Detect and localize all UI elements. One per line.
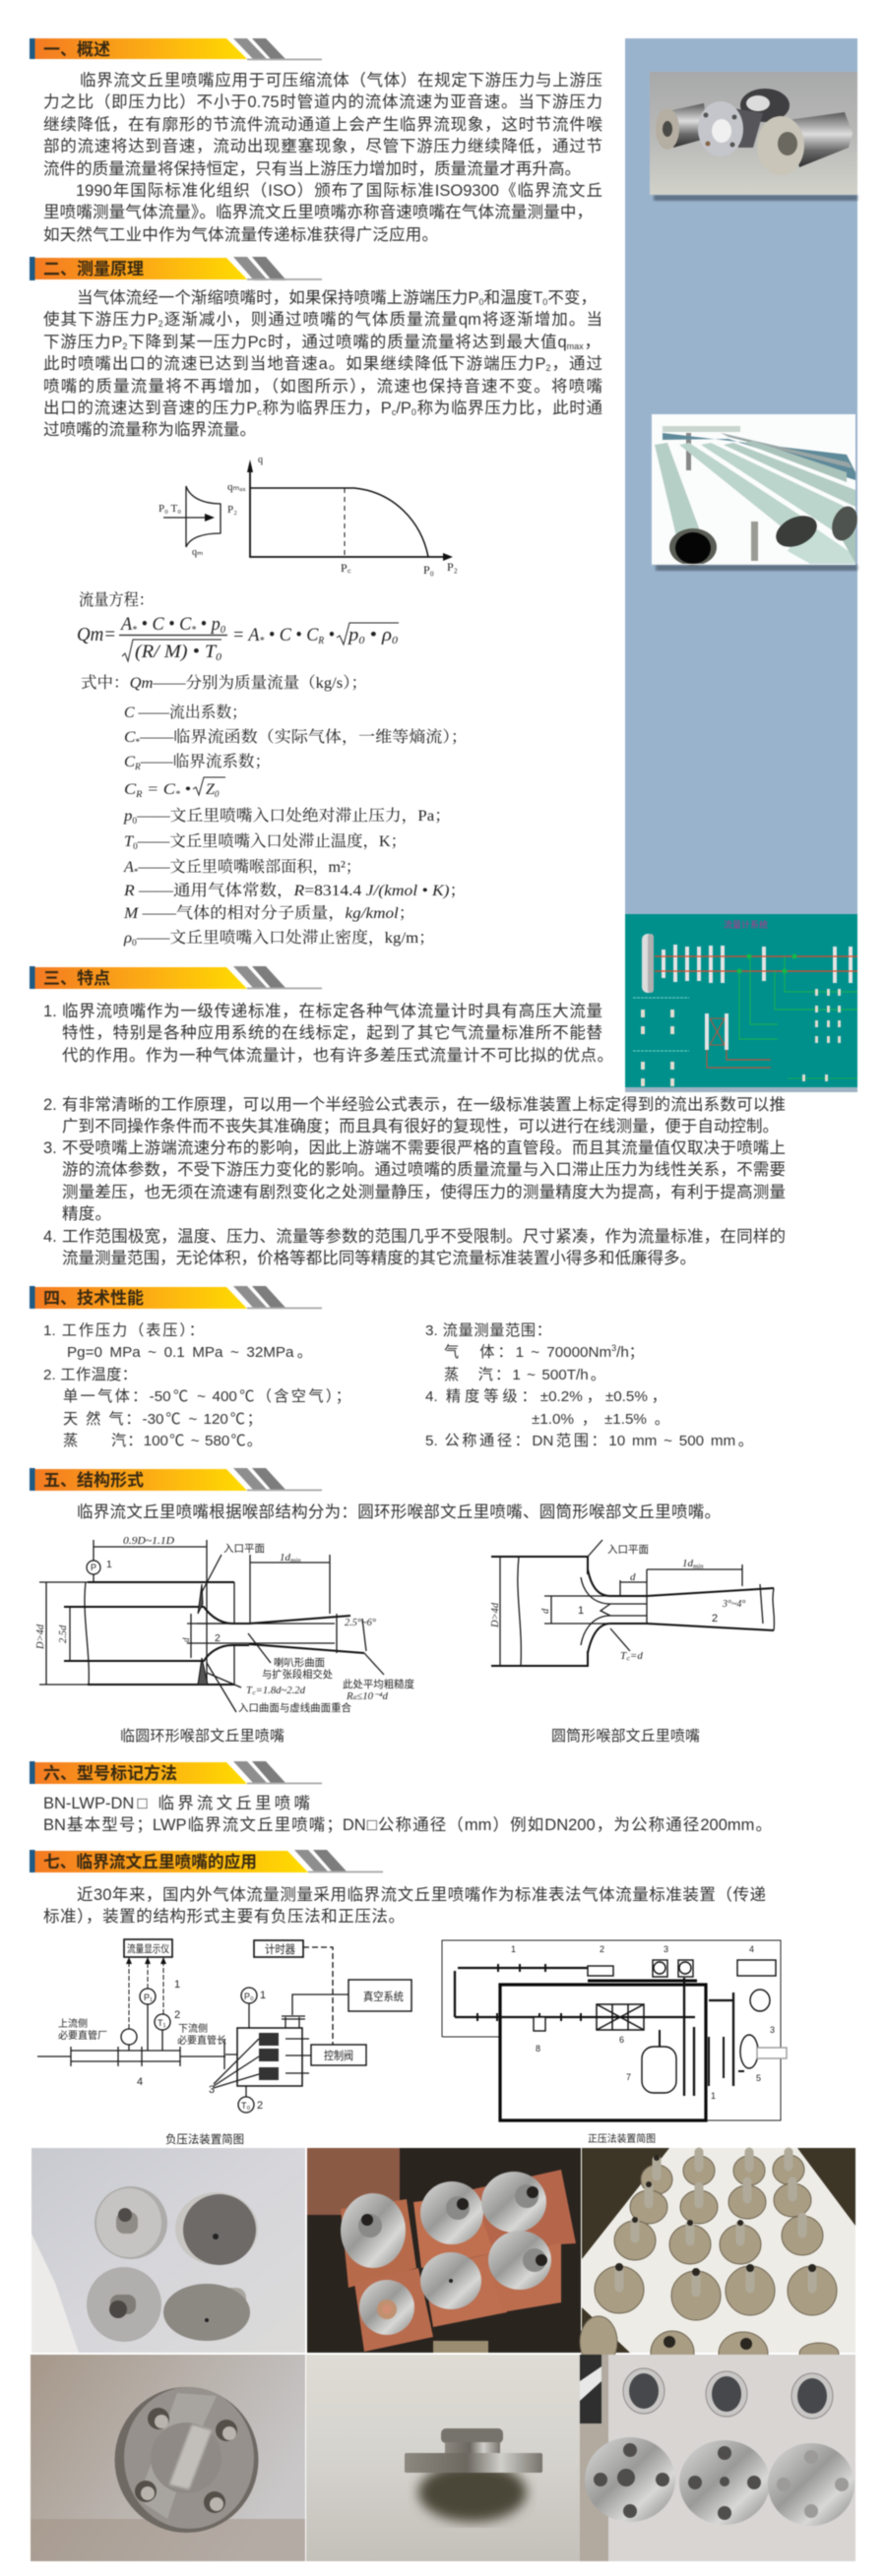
flow equation: Qm= xyxy=(77,624,116,645)
icon: converging nozzle: P₂ xyxy=(227,504,237,516)
chart axes and curve: q xyxy=(258,455,263,465)
piping xyxy=(455,1968,733,2096)
heading: section 2 xyxy=(29,256,323,281)
dimension and annotation labels xyxy=(490,1544,745,1662)
dimension and annotation labels: d xyxy=(181,1637,191,1642)
symbol definitions: ——文丘里喷嘴入口处滞止密度，kg/m； xyxy=(136,929,435,947)
symbol definitions: C xyxy=(124,781,135,798)
symbol definitions: ——临界流函数（实际气体，一维等熵流）； xyxy=(139,728,468,746)
flow equation xyxy=(77,614,399,663)
dimension and annotation labels: Ra≤10⁻⁴d xyxy=(346,1691,389,1702)
labels: 2 xyxy=(174,2009,180,2021)
flow equation: * xyxy=(132,625,137,636)
symbol definitions: p xyxy=(123,808,132,825)
symbol definitions: ——文丘里喷嘴入口处绝对滞止压力，Pa； xyxy=(136,807,451,825)
text block: technical performance right column: 4. 精度等级：±0.2%，±0.5%， xyxy=(425,1388,666,1405)
text block: application intro: 近30年来，国内外气体流量测量采用临界流文丘里喷嘴作为标准表法气体流量标准装置（传递 xyxy=(77,1886,766,1904)
text block: model designation: BN基本型号；LWP临界流文丘里喷嘴；DN□公称通径（mm）例如DN200，为公称通径200mm。 xyxy=(43,1816,772,1834)
dimension and annotation labels: D>4d xyxy=(35,1624,46,1650)
text block: measuring principle: 过喷嘴的流量称为临界流量。 xyxy=(43,421,256,439)
photo: venturi nozzle products xyxy=(650,72,857,201)
dimension and annotation labels: 3°~4° xyxy=(722,1599,745,1610)
timer box xyxy=(254,1940,303,1957)
formula: flow equation and symbol list xyxy=(77,590,468,948)
pressure tap symbol xyxy=(87,1561,100,1574)
chart axes and curve xyxy=(227,455,458,577)
dimension and annotation labels: 入口平面 xyxy=(607,1544,649,1556)
text: 2. xyxy=(43,1096,57,1114)
labels: P₁ xyxy=(144,1993,153,2002)
heading: section 3: 三、特点 xyxy=(43,969,110,988)
vacuum box xyxy=(348,1980,411,2011)
equipment xyxy=(534,1960,787,2093)
dimension and annotation labels: 2.5°~6° xyxy=(345,1618,377,1628)
equipment numbers: 8 xyxy=(536,2044,540,2054)
flow equation: 0 xyxy=(221,624,225,636)
dimension and annotation labels: d xyxy=(630,1571,636,1583)
symbol definitions: C ——流出系数； xyxy=(124,704,247,721)
flow equation: 0 xyxy=(392,635,399,646)
labels xyxy=(58,1979,266,2112)
text block: technical performance left column: 1. 工作压力（表压）： xyxy=(43,1322,204,1339)
heading: section 5: 五、结构形式 xyxy=(43,1470,144,1490)
photo: pipe installation xyxy=(652,414,861,571)
dimension and annotation labels: 0.9D~1.1D xyxy=(123,1536,174,1547)
symbol definitions: * xyxy=(134,867,139,877)
text block: overview: 临界流文丘里喷嘴应用于可压缩流体（气体）在规定下游压力与上游压 xyxy=(80,72,602,90)
labels: P₀ xyxy=(244,1992,254,2001)
dimension and annotation labels: 1 xyxy=(106,1559,112,1570)
diagram: cylindrical throat venturi nozzle xyxy=(490,1539,776,1668)
text block: structure intro: 临界流文丘里喷嘴根据喉部结构分为：圆环形喉部文丘里喷嘴、圆筒形喉部文丘里喷嘴。 xyxy=(77,1503,721,1521)
dimension and annotation labels: 2 xyxy=(215,1632,221,1644)
dimension and annotation labels: min xyxy=(290,1557,301,1564)
text block: measuring principle: 此时喷嘴出口的流速已达到当地音速a。如果继续降低下游端压力P2，通过 xyxy=(43,355,602,373)
list: feature 1: 代的作用。作为一种气体流量计，也有许多差压式流量计不可比拟的优点。 xyxy=(62,1047,613,1065)
symbol definitions: 0 xyxy=(132,816,138,826)
list: feature 3: 不受喷嘴上游端流速分布的影响，因此上游端不需要很严格的直管段。而且其流量值仅取决于喷嘴上 xyxy=(62,1139,786,1157)
dimension and annotation labels xyxy=(35,1536,414,1714)
photo: six flanges and caps xyxy=(579,2354,856,2562)
flow display box xyxy=(124,1939,172,1957)
text block: application intro xyxy=(43,1885,766,1926)
heading: section 4: 四、技术性能 xyxy=(43,1289,144,1308)
text block: measuring principle: 使其下游压力P2逐渐减小，则通过喷嘴的气体质量流量qm将逐渐增加。当 xyxy=(43,311,602,329)
dimension and annotation labels: 与扩张段相交处 xyxy=(262,1668,333,1681)
labels: T₀ xyxy=(241,2101,250,2111)
heading: section 6: 六、型号标记方法 xyxy=(43,1763,177,1783)
heading: section 6 xyxy=(29,1760,323,1785)
labels: 2 xyxy=(257,2100,263,2112)
caption: cylindrical throat nozzle: 圆筒形喉部文丘里喷嘴 xyxy=(551,1728,700,1745)
equipment numbers: 3 xyxy=(770,2025,775,2035)
symbol definitions: T xyxy=(124,833,134,850)
text block: overview: 力之比（即压力比）不小于0.75时管道内的流体流速为亚音速。当下游压力 xyxy=(43,93,602,111)
sidebar: blue column with product photos xyxy=(624,37,859,1092)
labels: 1 xyxy=(260,1990,266,2001)
dimension and annotation labels: min xyxy=(693,1563,704,1570)
dimension and annotation labels: 喇叭形曲面 xyxy=(274,1657,325,1669)
symbol definitions: 式中：Qm——分别为质量流量（kg/s）； xyxy=(81,674,367,692)
nozzle matrix xyxy=(597,2004,644,2030)
dimension and annotation labels: 2.5d xyxy=(58,1625,69,1643)
flow equation: • C • C xyxy=(137,614,192,635)
dimension and annotation labels: 2 xyxy=(712,1613,718,1625)
list: feature 1 xyxy=(43,1002,613,1065)
diagram: toroidal throat venturi nozzle xyxy=(35,1536,415,1714)
labels: 必要直管厂 xyxy=(58,2029,107,2042)
list: feature 1: 临界流喷嘴作为一级传递标准，在标定各种气体流量计时具有高压大流量 xyxy=(62,1003,602,1020)
heading: section 7 xyxy=(29,1849,384,1873)
text block: technical performance right column: 5. 公称通径：DN范围：10 mm ~ 500 mm。 xyxy=(425,1433,753,1449)
text block: technical performance right column xyxy=(425,1321,753,1449)
text block: technical performance left column: 蒸 汽：100℃ ~ 580℃。 xyxy=(63,1433,262,1449)
dimension and annotation labels: 此处平均粗糙度 xyxy=(343,1678,414,1690)
flow equation: • ρ xyxy=(364,625,392,645)
symbol definitions: • xyxy=(180,781,191,798)
equipment numbers: 6 xyxy=(619,2035,624,2045)
text block: technical performance right column: ±1.0%，±1.5%。 xyxy=(532,1411,669,1428)
flow equation: R xyxy=(317,636,324,646)
heading: section 3 xyxy=(29,965,323,990)
list: feature 3 xyxy=(43,1138,786,1223)
list: feature 4: 工作范围极宽，温度、压力、流量等参数的范围几乎不受限制。尺寸紧凑，作为流量标准，在同样的 xyxy=(62,1228,786,1246)
text: 1. xyxy=(43,1003,57,1020)
dimension and annotation labels: d xyxy=(540,1608,551,1614)
timer box: 计时器 xyxy=(265,1943,295,1956)
symbol definitions: C xyxy=(124,754,135,770)
flow equation: • p xyxy=(196,614,221,635)
dimension and annotation labels: 入口曲面与虚线曲面重合 xyxy=(238,1701,351,1714)
heading: section 5 xyxy=(29,1467,323,1492)
equipment numbers xyxy=(511,1944,775,2101)
heading: section 1: 一、概述 xyxy=(43,40,110,59)
labels: 下流侧 xyxy=(178,2022,208,2035)
icon: converging nozzle: qₘ xyxy=(192,547,203,558)
text block: measuring principle xyxy=(43,288,602,439)
photo: grey fabric with four nozzle discs xyxy=(32,2147,305,2354)
dimension and annotation labels: P xyxy=(91,1563,96,1572)
list: feature 2 xyxy=(43,1095,786,1135)
flow equation: * xyxy=(260,636,264,646)
list: feature 3: 精度。 xyxy=(62,1205,111,1223)
flow equation: 0 xyxy=(358,635,365,646)
diagram: positive pressure setup xyxy=(441,1938,788,2123)
text block: overview: 流件的质量流量将保持恒定，只有当上游压力增加时，质量流量才再升高。 xyxy=(43,160,581,178)
symbol definitions: M ——气体的相对分子质量， kg/kmol； xyxy=(123,904,415,922)
heading: section 7: 七、临界流文丘里喷嘴的应用 xyxy=(43,1852,257,1871)
text block: model designation: BN-LWP-DN□ 临界流文丘里喷嘴 xyxy=(43,1795,310,1812)
equipment numbers: 2 xyxy=(600,1944,604,1954)
text block: technical performance right column: 气 体：1 ~ 70000Nm3/h； xyxy=(444,1343,644,1361)
caption: negative pressure setup: 负压法装置简图 xyxy=(165,2132,244,2146)
labels: T₁ xyxy=(158,2018,166,2028)
equipment numbers: 4 xyxy=(749,1944,754,1954)
photo: nozzles on wooden boards xyxy=(306,2147,582,2354)
equipment numbers: 5 xyxy=(756,2073,761,2083)
caption: positive pressure setup: 正压法装置简图 xyxy=(588,2132,656,2145)
symbol definitions: 0 xyxy=(132,938,137,948)
text block: technical performance left column: 2. 工作温度： xyxy=(43,1367,137,1383)
symbol definitions: ——文丘里喷嘴喉部面积，m²； xyxy=(137,858,361,876)
flow equation: p xyxy=(348,625,358,645)
chart axes and curve: P₀ xyxy=(423,563,434,577)
nozzle chamber xyxy=(214,1994,348,2097)
caption: toroidal throat nozzle: 临圆环形喉部文丘里喷嘴 xyxy=(120,1728,285,1745)
symbol definitions: = C xyxy=(142,781,175,798)
chart axes and curve: P₂ xyxy=(447,560,458,574)
equipment numbers: 3 xyxy=(664,1944,668,1954)
labels: 1 xyxy=(174,1979,180,1991)
text block: measuring principle: 下游压力P2下降到某一压力Pc时，通过喷嘴的质量流量将达到最大值qmax， xyxy=(43,334,601,351)
text block: overview: 继续降低，在有廓形的节流件流动通道上会产生临界流现象，这时节流件喉 xyxy=(43,116,602,134)
symbol definitions xyxy=(81,674,468,948)
dimension and annotation labels: 1d xyxy=(280,1552,290,1564)
heading: section 1 xyxy=(29,37,323,61)
text: 4. xyxy=(43,1228,57,1246)
symbol definitions: * xyxy=(175,789,181,799)
list: feature 4: 流量测量范围，无论体积，价格等都比同等精度的其它流量标准装置小得多和低廉得多。 xyxy=(62,1250,696,1267)
chart axes and curve: P꜀ xyxy=(341,561,351,575)
symbol definitions: * xyxy=(135,737,141,747)
text block: measuring principle: 当气体流经一个渐缩喷嘴时，如果保持喷嘴上游端压力P0和温度T0不变， xyxy=(77,289,597,307)
text: 3. xyxy=(43,1139,57,1157)
list: feature 2: 有非常清晰的工作原理，可以用一个半经验公式表示，在一级标准装置上标定得到的流出系数可以推 xyxy=(62,1096,786,1114)
text block: technical performance left column: 天 然 气：-30℃ ~ 120℃； xyxy=(63,1411,262,1428)
list: feature 1: 特性，特别是各种应用系统的在线标定，起到了其它气流量标准所不能替 xyxy=(62,1024,602,1042)
labels: 3 xyxy=(209,2084,215,2096)
text block: model designation xyxy=(43,1794,772,1834)
text block: overview: 如天然气工业中作为气体流量传递标准获得广泛应用。 xyxy=(43,226,438,244)
symbol definitions: R xyxy=(134,762,141,771)
flow equation: * xyxy=(191,625,196,636)
dimension and annotation labels: D>4d xyxy=(490,1602,501,1628)
flow equation: (R/ M) • T xyxy=(135,642,211,662)
dimension and annotation labels: 入口平面 xyxy=(223,1543,265,1555)
equation heading: 流量方程： xyxy=(79,590,154,609)
icon: converging nozzle xyxy=(158,486,237,558)
control valve box xyxy=(311,2045,366,2065)
dimension and annotation labels: T꜀=d xyxy=(620,1650,643,1662)
panel: teal process control screen xyxy=(625,914,857,1092)
photo: flange side view xyxy=(305,2354,581,2562)
text block: application intro: 标准），装置的结构形式主要有负压法和正压法。 xyxy=(43,1908,405,1926)
text block: technical performance left column: 单一气体：-50℃ ~ 400℃（含空气）； xyxy=(63,1388,350,1405)
text block: overview xyxy=(43,71,602,244)
symbol definitions: ——临界流系数； xyxy=(140,753,271,770)
text block: technical performance right column: 蒸 汽：1 ~ 500T/h。 xyxy=(444,1367,605,1383)
symbol definitions: 0 xyxy=(133,841,138,851)
instrument circles xyxy=(121,1988,257,2113)
symbol definitions: R ——通用气体常数， R=8314.4 J/(kmol • K) ； xyxy=(123,882,467,899)
vacuum box: 真空系统 xyxy=(363,1990,404,2003)
text block: measuring principle: 喷嘴的质量流量将不再增加，（如图所示），流速也保持音速不变。将喷嘴 xyxy=(43,378,602,396)
diagram: negative pressure setup xyxy=(36,1937,413,2114)
list: feature 3: 游的流体参数，不受下游压力变化的影响。通过喷嘴的质量流量与入口滞止压力为线性关系，不需要 xyxy=(62,1161,786,1179)
flow equation: 0 xyxy=(216,651,222,663)
heading: section 2: 二、测量原理 xyxy=(43,260,144,278)
symbol definitions: A xyxy=(123,859,134,876)
equipment numbers: 7 xyxy=(626,2072,631,2082)
text block: overview: 部的流速将达到音速，流动出现壅塞现象，尽管下游压力继续降低，通过节 xyxy=(43,138,602,155)
dimension and annotation labels: 1 xyxy=(578,1605,584,1617)
chart axes and curve: qₘₐₓ xyxy=(227,481,246,493)
flow display box: 流量显示仪 xyxy=(127,1942,169,1955)
text block: technical performance left column xyxy=(43,1321,350,1449)
flow equation: A xyxy=(121,614,133,635)
text block: technical performance right column: 3. 流量测量范围： xyxy=(425,1322,551,1339)
symbol definitions: R xyxy=(135,789,143,799)
text block: technical performance left column: Pg=0 MPa ~ 0.1 MPa ~ 32MPa。 xyxy=(67,1344,312,1361)
heading: section 4 xyxy=(29,1285,323,1310)
symbol definitions: ——文丘里喷嘴入口处滞止温度，K； xyxy=(137,832,407,850)
flow equation: • C • C xyxy=(264,625,319,645)
symbol definitions: ρ xyxy=(123,930,132,947)
icon: converging nozzle: P₀ T₀ xyxy=(158,503,181,515)
dimension and annotation labels: 1d xyxy=(682,1558,693,1569)
pipe run xyxy=(37,2004,225,2069)
list: feature 3: 测量差压，也无须在流速有剧烈变化之处测量静压，使得压力的测量精度大为提高，有利于提高测量 xyxy=(62,1184,786,1201)
symbol definitions: Z xyxy=(206,781,215,798)
list: feature 2: 广到不同操作条件而不丧失其准确度；而且具有很好的复现性，可以进行在线测量，便于自动控制。 xyxy=(62,1118,779,1135)
control valve box: 控制阀 xyxy=(324,2049,353,2062)
screen title: 流量计系统 xyxy=(724,919,768,930)
equipment numbers: 1 xyxy=(511,1944,516,1954)
dimension and annotation labels: T꜀=1.8d~2.2d xyxy=(246,1686,306,1696)
labels: 上流侧 xyxy=(58,2017,88,2030)
flow equation: = A xyxy=(232,625,261,645)
symbol definitions: 0 xyxy=(215,789,220,799)
flow equation: • xyxy=(324,625,335,645)
text block: overview: 1990年国际标准化组织（ISO）颁布了国际标准ISO9300《临界流文丘 xyxy=(76,182,602,200)
photo: many nozzles on white fabric xyxy=(579,2147,856,2356)
equipment numbers: 1 xyxy=(711,2091,716,2101)
photo: flange front view xyxy=(30,2354,305,2562)
list: feature 4 xyxy=(43,1227,786,1267)
text block: overview: 里喷嘴测量气体流量》。临界流文丘里喷嘴亦称音速喷嘴在气体流量测量中， xyxy=(43,204,593,221)
labels: 4 xyxy=(137,2076,143,2088)
symbol definitions: C xyxy=(124,729,136,746)
chart: flow versus downstream pressure with nozzle sketch xyxy=(158,455,458,577)
text block: measuring principle: 出口的流速达到音速的压力Pc称为临界压力，Pc/P0称为临界压力比，此时通 xyxy=(43,399,602,417)
labels: 必要直管长 xyxy=(177,2034,226,2047)
